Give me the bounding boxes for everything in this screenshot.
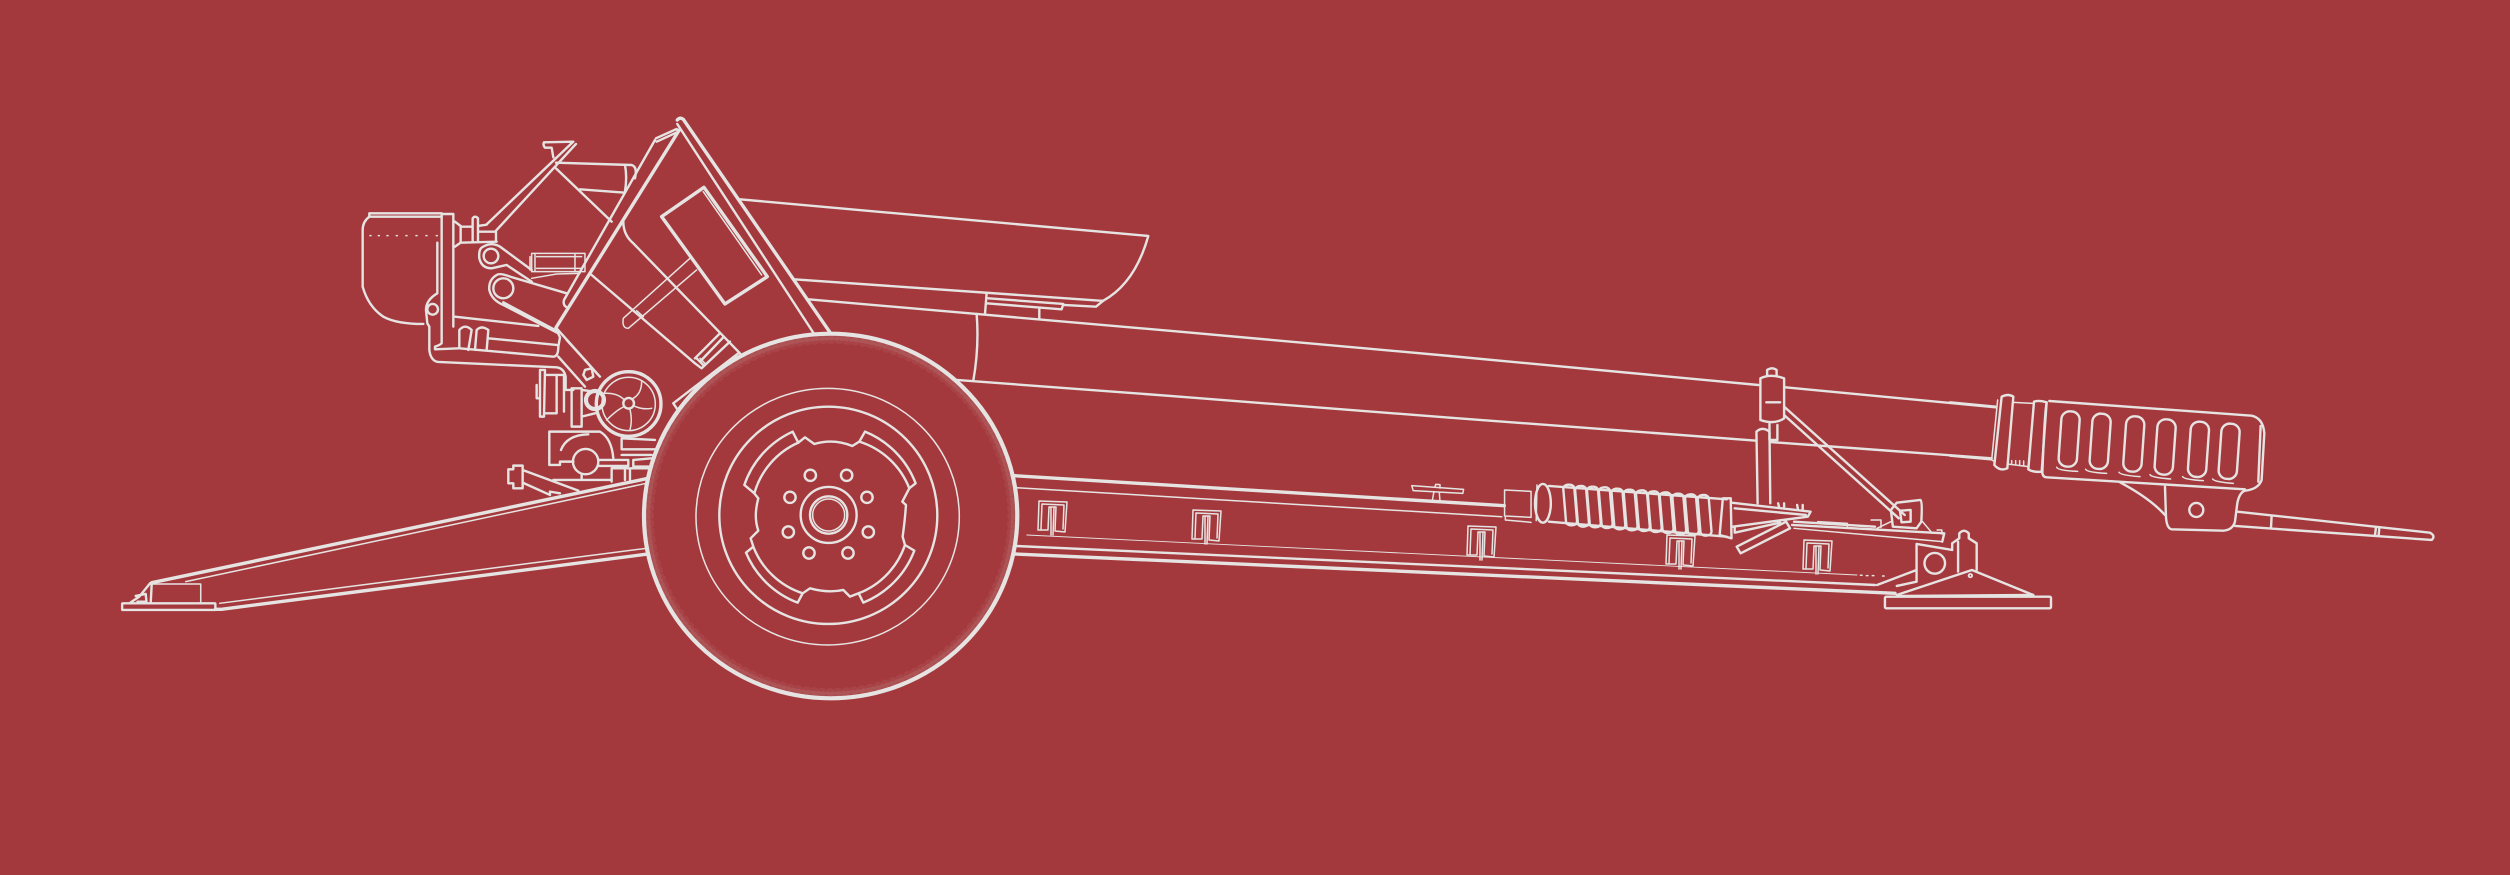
shield window panel: [662, 187, 767, 304]
muzzle brake slots: [2057, 411, 2240, 483]
wheel: [644, 334, 1017, 698]
wheel bolts: [783, 470, 874, 559]
shield top and recoil housing: [740, 199, 1180, 397]
sight head: [1760, 368, 1784, 440]
traversing arm: [487, 142, 576, 231]
elevation sector: [549, 432, 613, 465]
pivot block: [1877, 544, 1952, 586]
recuperator with coil spring: [1505, 484, 1732, 538]
gun barrel: [1180, 332, 1996, 458]
sight post: [1756, 429, 1770, 503]
shield plates: [556, 130, 679, 328]
link arms: [484, 249, 498, 263]
trail brackets: [1038, 501, 1832, 574]
tyre outline: [644, 334, 1017, 698]
hub centre: [801, 487, 857, 543]
strut bracket: [1891, 500, 1922, 528]
lower carriage body: [455, 317, 560, 357]
top cylinder: [556, 163, 636, 222]
hub segments: [744, 432, 798, 493]
forward trail leg: [1014, 476, 1895, 593]
rammer rod: [2235, 512, 2433, 540]
breech, shield and elevating mechanism: [363, 118, 831, 495]
sight post and forward mechanism: [1732, 368, 2051, 608]
rear trail leg: [122, 478, 648, 610]
muzzle brake: [1950, 395, 2433, 540]
diagonal strut: [1784, 407, 1905, 518]
small cylinder: [530, 253, 585, 278]
handwheel: [586, 372, 661, 436]
T-handle on trail: [1412, 484, 1464, 502]
lower lever: [508, 466, 578, 495]
spade: [1952, 531, 1977, 572]
deck: [1792, 522, 1944, 542]
gear stack: [537, 370, 595, 427]
rim rings: [696, 388, 959, 645]
breech block: [363, 213, 442, 324]
tyre tread fuzz: [648, 338, 1013, 694]
clamp plate and arm: [1732, 503, 1811, 553]
handle rod: [623, 258, 697, 328]
